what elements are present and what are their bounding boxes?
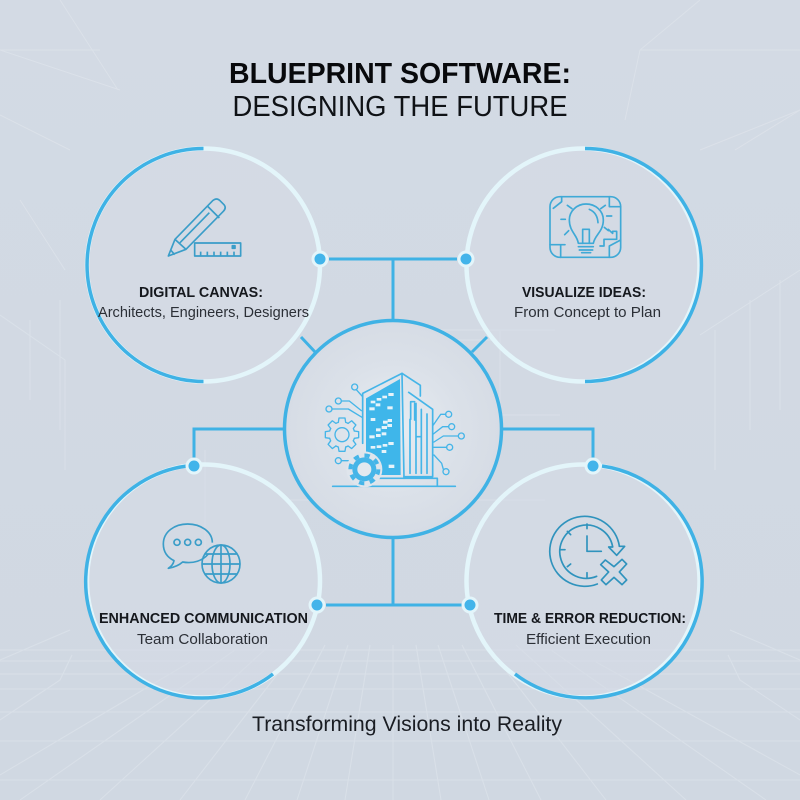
title bbox=[229, 58, 571, 123]
text: visualize ideas label bbox=[514, 285, 661, 321]
icon: speech bubble and globe bbox=[163, 524, 240, 583]
text: digital canvas label: DIGITAL CANVAS: bbox=[139, 285, 263, 301]
panel: time and error reduction bbox=[466, 464, 702, 698]
icon: solid gear bbox=[346, 451, 382, 487]
text: time and error reduction label: Efficient Execution bbox=[526, 632, 651, 648]
text: enhanced communication label: Team Collaboration bbox=[137, 632, 268, 648]
panel: visualize ideas bbox=[466, 148, 701, 382]
icon: smart building with gears bbox=[325, 373, 464, 487]
icon: pencil and ruler bbox=[168, 199, 241, 256]
panel: digital canvas bbox=[87, 148, 320, 382]
title: DESIGNING THE FUTURE bbox=[232, 91, 568, 123]
text: digital canvas label: Architects, Engineers, Designers bbox=[98, 305, 309, 321]
text: visualize ideas label: VISUALIZE IDEAS: bbox=[522, 285, 646, 301]
text: digital canvas label bbox=[98, 285, 309, 321]
icon: outlined gear bbox=[325, 418, 359, 451]
text: time and error reduction label: TIME & ERROR REDUCTION: bbox=[494, 611, 686, 627]
text: visualize ideas label: From Concept to Plan bbox=[514, 305, 661, 321]
text: enhanced communication label bbox=[99, 611, 308, 648]
title: BLUEPRINT SOFTWARE: bbox=[229, 58, 571, 90]
text: enhanced communication label: ENHANCED COMMUNICATION bbox=[99, 611, 308, 627]
icon: clock with arrow and cross bbox=[550, 516, 627, 586]
panel: enhanced communication bbox=[86, 464, 320, 698]
icon: light bulb on blueprint bbox=[550, 197, 621, 257]
connector nodes bbox=[186, 250, 602, 614]
connector lines bbox=[194, 259, 593, 605]
tagline: Transforming Visions into Reality bbox=[252, 713, 563, 736]
icon: circuit traces bbox=[326, 384, 464, 475]
panel: central hub bbox=[284, 320, 502, 538]
text: time and error reduction label bbox=[494, 611, 686, 648]
